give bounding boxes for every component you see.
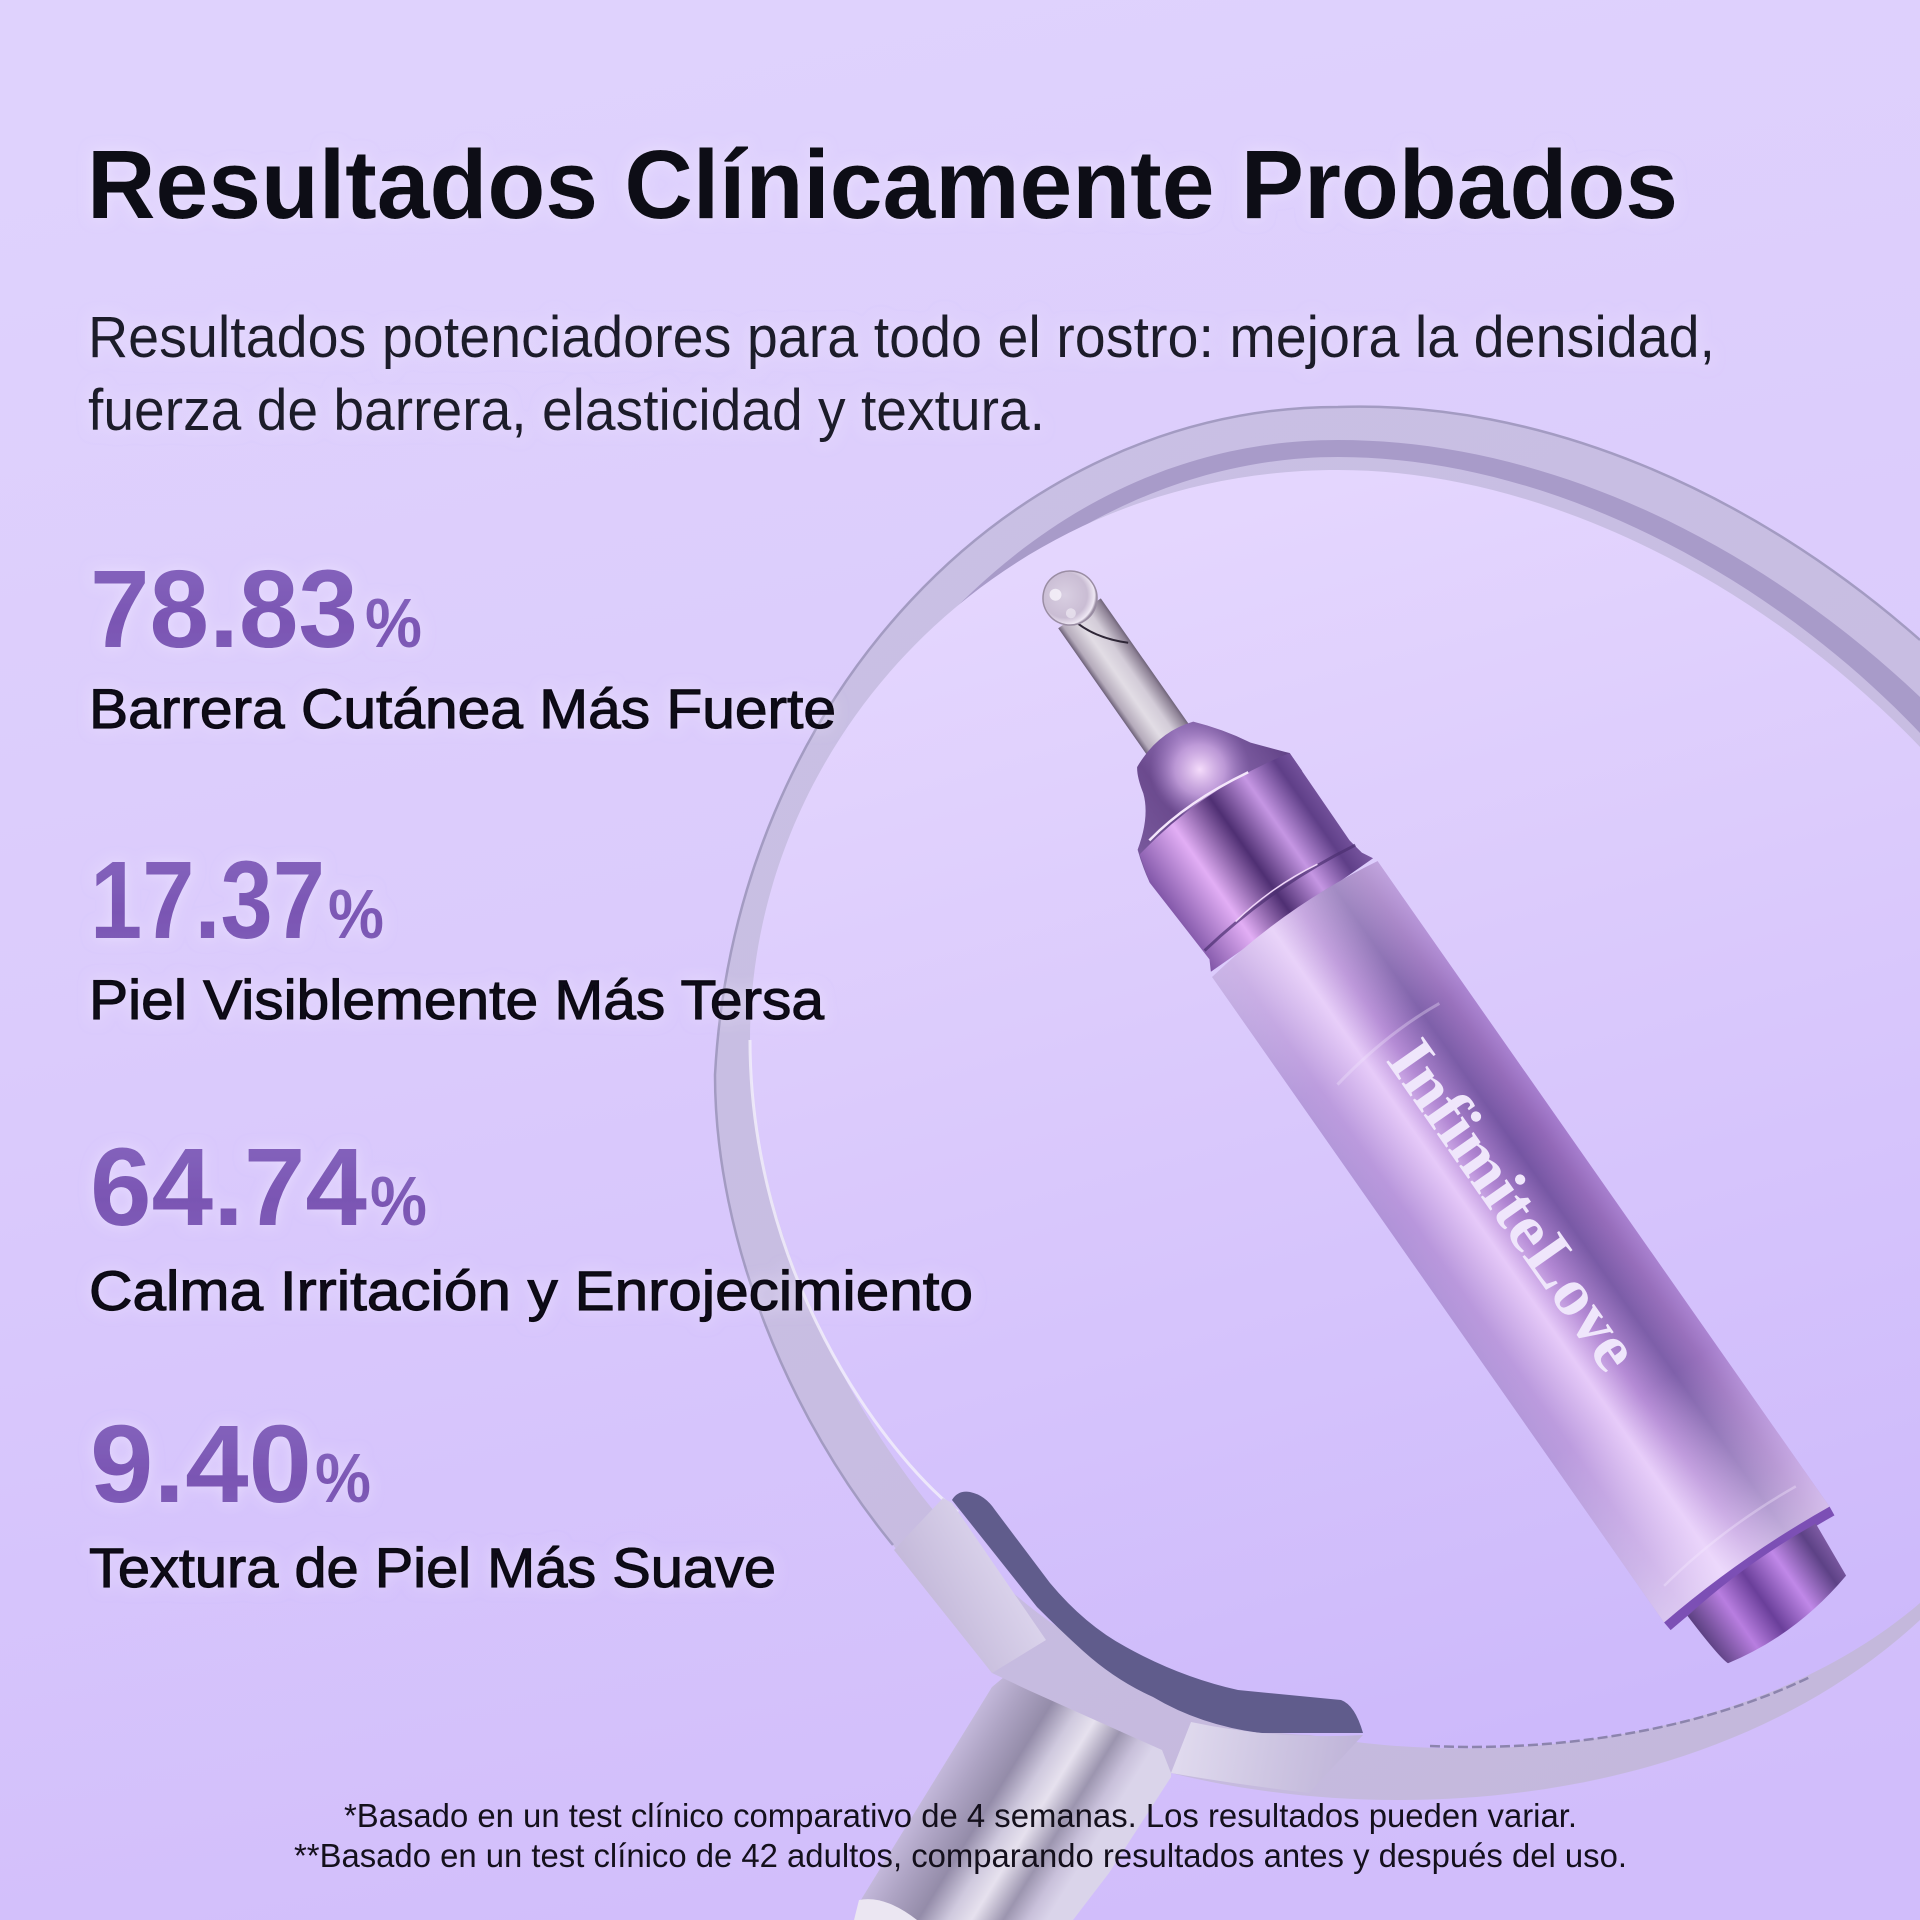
- value 9.40%: %: [315, 1439, 371, 1517]
- right collar: [1171, 1722, 1363, 1793]
- footnotes: *Basado en un test clínico comparativo de 4 semanas. Los resultados pueden variar.: [344, 1797, 1577, 1834]
- label smoothness: Piel Visiblemente Más Tersa: [89, 968, 825, 1031]
- footnotes: **Basado en un test clínico de 42 adultos, comparando resultados antes y después del uso.: [294, 1837, 1627, 1874]
- value 78.83%: 78.83: [90, 548, 358, 671]
- footnotes: [294, 1797, 1627, 1874]
- stat: calming: [89, 1126, 973, 1322]
- value 17.37%: %: [328, 875, 384, 953]
- glass ball tip: [1032, 560, 1108, 636]
- ring upper dark band: [790, 440, 1920, 850]
- stat: barrier: [89, 548, 836, 740]
- ring lower edge line: [1430, 1677, 1810, 1747]
- value 64.74%: 64.74: [90, 1126, 367, 1249]
- brand text on pen: InfimiteLove: [1373, 1025, 1656, 1384]
- label texture: Textura de Piel Más Suave: [89, 1536, 776, 1599]
- label calming: Calma Irritación y Enrojecimiento: [89, 1259, 973, 1322]
- dark inner mount: [952, 1492, 1363, 1733]
- subtitle: fuerza de barrera, elasticidad y textura.: [88, 378, 1045, 443]
- title: Resultados Clínicamente Probados: [87, 130, 1678, 239]
- magnifying glass: [715, 407, 1920, 1920]
- value 64.74%: %: [370, 1162, 427, 1240]
- pen applicator: [972, 518, 1874, 1686]
- metal stem: [1058, 598, 1193, 759]
- left collar: [894, 1498, 1046, 1673]
- bottom rim: [1661, 1503, 1835, 1631]
- lens: [750, 470, 1920, 1748]
- subtitle: Resultados potenciadores para todo el rostro: mejora la densidad,: [88, 305, 1715, 370]
- value 78.83%: %: [365, 584, 422, 662]
- bottom cap: [1684, 1521, 1857, 1673]
- ring outer edge line: [715, 407, 1920, 1545]
- frosted body: [1208, 855, 1830, 1623]
- ring inner highlight: [750, 1040, 958, 1512]
- value 17.37%: 17.37: [90, 839, 325, 962]
- handle: [854, 1657, 1171, 1920]
- cap band: [1126, 737, 1373, 972]
- stat: texture: [89, 1403, 776, 1599]
- ring: [715, 407, 1920, 1800]
- value 9.40%: 9.40: [90, 1403, 312, 1526]
- subtitle: [88, 305, 1715, 443]
- stat: smoothness: [89, 839, 825, 1031]
- cap neck: [1086, 683, 1305, 883]
- label barrier: Barrera Cutánea Más Fuerte: [89, 677, 836, 740]
